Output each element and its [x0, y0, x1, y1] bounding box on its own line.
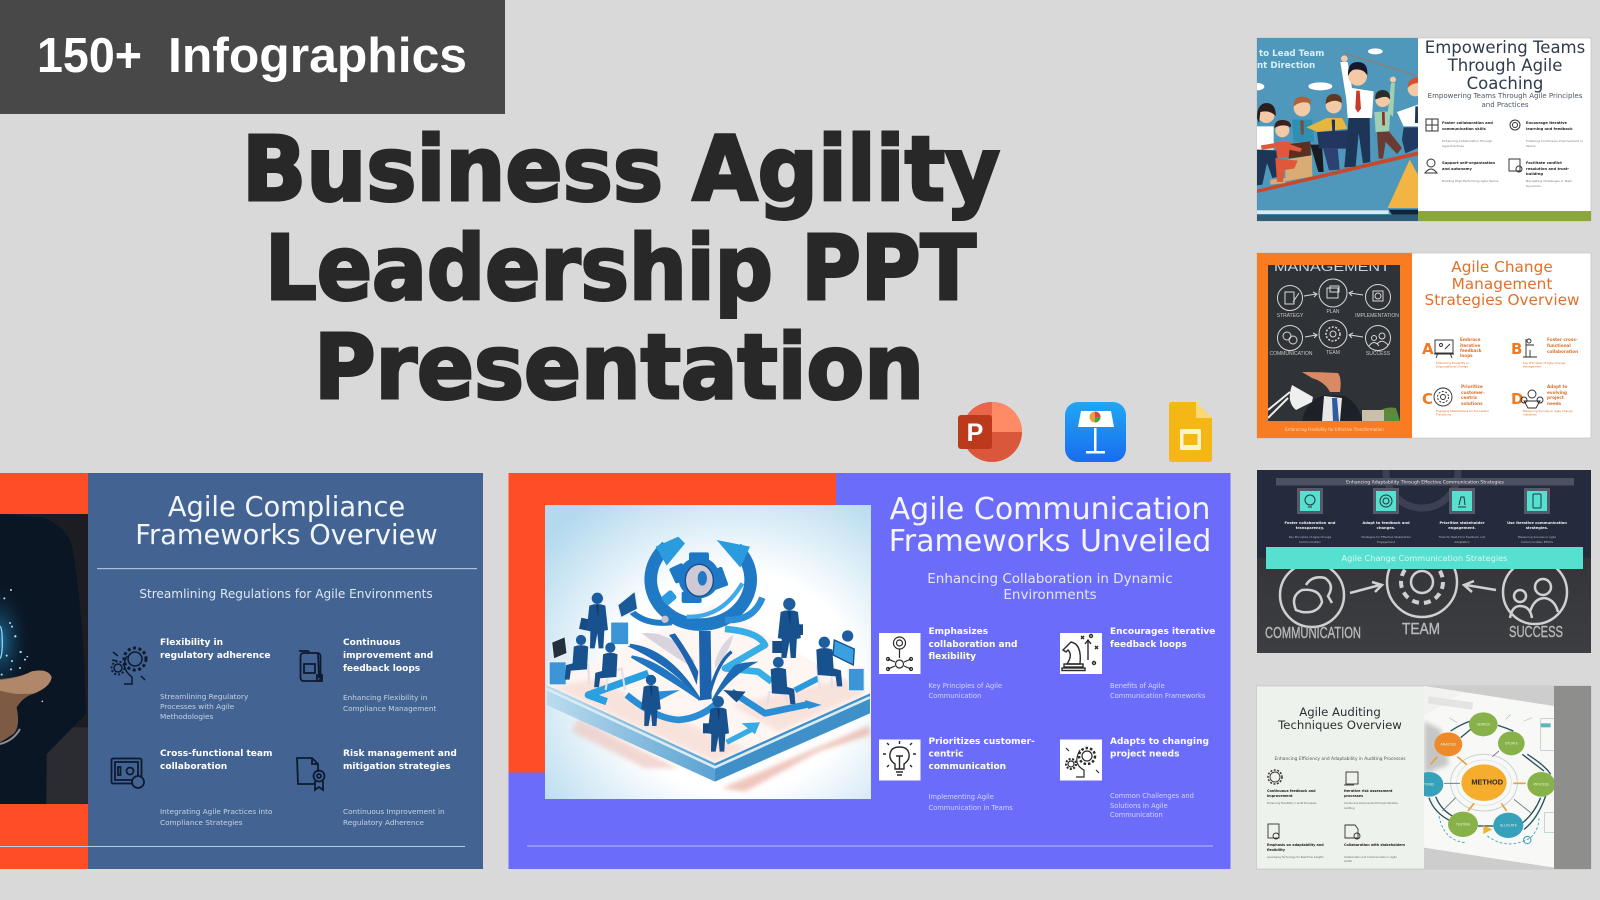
items text: Encourage iterative — [1526, 121, 1567, 125]
columns text — [1285, 521, 1567, 544]
item: emphasizes collaboration: Communication — [928, 692, 981, 700]
photo: method diagram: METHOD — [1471, 778, 1503, 787]
items text: feedback — [1460, 348, 1482, 353]
items text: Emphasis on adaptability and — [1267, 843, 1324, 847]
heading — [1425, 38, 1585, 93]
item: adapts — [1110, 737, 1209, 819]
items text: Facilitate conflict — [1526, 161, 1562, 165]
items text: Auditing — [1344, 806, 1355, 810]
item: cross-functional: Compliance Strategies — [160, 818, 243, 827]
columns text: Foster collaboration and — [1285, 521, 1336, 525]
items text: Embracing Flexibility in — [1436, 361, 1469, 365]
items text: Engaging Stakeholders for Successful — [1436, 409, 1489, 413]
item: customer-centric — [928, 737, 1035, 812]
item: emphasizes collaboration: flexibility — [928, 652, 976, 662]
items text: resolution and trust- — [1526, 167, 1570, 171]
photo: method diagram: UPDATE — [1505, 742, 1518, 746]
items text: and autonomy — [1442, 167, 1472, 171]
subheading — [927, 571, 1173, 603]
item: customer-centric: Communication in Teams — [928, 804, 1013, 812]
items text: loops — [1460, 353, 1473, 358]
columns text: Engagement — [1377, 540, 1396, 544]
teal title bar — [1266, 547, 1583, 569]
item: iterative feedback: feedback loops — [1110, 640, 1187, 650]
item: customer-centric: Prioritizes customer- — [928, 737, 1035, 747]
icon: gears in bulb — [112, 648, 146, 684]
illustration: team on seesaw — [1251, 38, 1423, 221]
heading: Agile Auditing — [1299, 705, 1381, 719]
items text — [1267, 789, 1405, 863]
item: emphasizes collaboration — [928, 627, 1017, 700]
item: flexibility: Streamlining Regulatory — [160, 692, 249, 701]
items text: Continuous feedback and — [1267, 789, 1316, 793]
items text — [1435, 337, 1578, 416]
items text: flexibility — [1267, 848, 1286, 852]
icon: certified document — [297, 758, 324, 790]
items text: processes — [1344, 794, 1363, 798]
photo: method diagram — [1415, 686, 1558, 869]
items text: Key Principles of Agile Change — [1523, 361, 1566, 365]
items text: customer- — [1461, 390, 1485, 395]
item: adapts: project needs — [1110, 750, 1179, 760]
items text: Adapt to — [1547, 384, 1568, 389]
items text: improvement — [1267, 794, 1293, 798]
item: emphasizes collaboration: Key Principles of Agile — [928, 682, 1002, 690]
items text: Enhancing Flexibility in Audit Processes — [1267, 801, 1317, 805]
items text: solutions — [1461, 401, 1483, 406]
items text: Management — [1523, 364, 1542, 368]
items text: Transitions — [1435, 412, 1452, 416]
photo: chalkboard diagram: IMPLEMENTATION — [1355, 313, 1399, 319]
item: iterative feedback: Communication Frameworks — [1110, 692, 1206, 700]
columns text: Adapt to feedback and — [1362, 521, 1410, 525]
item: cross-functional: Integrating Agile Practices into — [160, 807, 273, 816]
item: iterative feedback: Benefits of Agile — [1110, 682, 1165, 690]
heading: Coaching — [1467, 74, 1543, 93]
heading: Frameworks Unveiled — [889, 524, 1211, 559]
items text: Audits — [1344, 859, 1353, 863]
item: flexibility: Processes with Agile — [160, 702, 235, 711]
photo: chalkboard diagram: STRATEGY — [1277, 313, 1304, 319]
thumbnail: Empowering Teams — [1251, 38, 1591, 221]
item: flexibility — [160, 638, 270, 721]
icon: chess knight strategy — [1060, 633, 1102, 674]
heading — [1277, 705, 1402, 732]
thumbnail: Empowering Teams: nt Direction — [1257, 61, 1315, 71]
item: continuous improvement: improvement and — [343, 651, 433, 661]
chalk labels — [1265, 621, 1563, 642]
columns text: Adaptation — [1454, 540, 1470, 544]
items text: Support self-organization — [1442, 161, 1496, 165]
icon: safe — [112, 758, 144, 788]
items text: Teams — [1525, 144, 1536, 148]
heading: Agile Compliance — [168, 492, 405, 523]
heading: Techniques Overview — [1277, 718, 1402, 732]
chalk labels: COMMUNICATION — [1265, 625, 1361, 642]
boxes and briefcase — [1270, 141, 1312, 185]
letters: B — [1511, 340, 1522, 358]
photo: method diagram: SEARCH — [1477, 723, 1491, 727]
photo: chalkboard diagram: MANAGEMENT — [1274, 259, 1390, 274]
columns text: Tools for Real-Time Feedback and — [1438, 535, 1485, 539]
items text: evolving — [1547, 390, 1567, 395]
items text: Fostering Continuous Improvement in — [1526, 139, 1583, 143]
item: flexibility: Flexibility in — [160, 638, 223, 648]
columns text: changes. — [1377, 526, 1396, 530]
item: iterative feedback — [1110, 627, 1215, 700]
icon: Keynote — [1065, 402, 1126, 462]
item: flexibility: regulatory adherence — [160, 651, 270, 661]
items text — [1442, 121, 1583, 188]
subheading: and Practices — [1481, 101, 1529, 109]
item icons — [1434, 339, 1543, 408]
item: cross-functional — [160, 749, 273, 827]
item: adapts: Communication — [1110, 811, 1163, 819]
heading: Management — [1452, 275, 1552, 293]
item: customer-centric: communication — [928, 762, 1006, 772]
item: adapts: Solutions in Agile — [1110, 802, 1168, 810]
man: green shirt — [1374, 77, 1402, 159]
photo: chalkboard diagram — [1268, 259, 1400, 421]
subheading: Streamlining Regulations for Agile Environments — [139, 587, 433, 601]
subheading: Enhancing Efficiency and Adaptability in Auditing Processes — [1274, 756, 1406, 762]
man: yellow shirt — [1306, 94, 1348, 170]
icon: gears bulb — [1060, 740, 1102, 780]
items text: needs — [1547, 401, 1562, 406]
items text: building — [1526, 172, 1543, 176]
subheading — [1428, 92, 1583, 109]
thumbnail: Empowering Teams: to Lead Team — [1259, 49, 1324, 59]
photo: method diagram: PROCESS — [1534, 783, 1549, 787]
item: iterative feedback: Encourages iterative — [1110, 627, 1215, 637]
items text: functional — [1547, 343, 1571, 348]
items text: Embrace — [1460, 337, 1481, 342]
title: Presentation — [314, 315, 924, 419]
item: continuous improvement: Compliance Management — [343, 704, 436, 713]
heading: Strategies Overview — [1424, 291, 1580, 309]
items text: Agile Practices — [1442, 144, 1464, 148]
icon: Google Slides — [1169, 402, 1212, 462]
item: risk management: Risk management and — [343, 749, 457, 759]
item: risk management: Continuous Improvement in — [343, 807, 445, 816]
items text: iterative — [1460, 343, 1480, 348]
items text: Collaboration with stakeholders — [1344, 843, 1405, 847]
thumbnail: Agile Change Communication: Enhancing Adaptability Through Effective Communication Strategies — [1346, 480, 1504, 486]
items text: communication skills — [1442, 127, 1487, 131]
subheading: Empowering Teams Through Agile Principles — [1428, 92, 1583, 100]
columns text: engagement. — [1448, 526, 1476, 530]
thumbnail: Agile Change Communication — [1257, 470, 1591, 653]
chalk diagram — [1278, 569, 1568, 628]
photo: method diagram: TIONS — [1423, 783, 1434, 787]
heading — [889, 492, 1211, 559]
items text: Foster collaboration and — [1442, 121, 1493, 125]
letters: A — [1422, 340, 1434, 358]
heading: Empowering Teams — [1425, 38, 1585, 57]
items text: Continuous Improvement through Iterative — [1344, 801, 1398, 805]
items text: centric — [1461, 395, 1478, 400]
heading: Frameworks Overview — [135, 520, 438, 551]
title — [242, 117, 1000, 419]
subheading: Environments — [1003, 587, 1097, 603]
item: emphasizes collaboration: Emphasizes — [928, 627, 988, 637]
columns text: Strategies for Effective Stakeholder — [1361, 535, 1412, 539]
teal title bar: Agile Change Communication Strategies — [1342, 553, 1507, 563]
item: adapts: Common Challenges and — [1110, 792, 1194, 800]
chalk labels: TEAM — [1402, 621, 1440, 638]
columns text: Use iterative communication — [1507, 521, 1567, 525]
items text: Leveraging Technology for Real-Time Insights — [1267, 855, 1324, 859]
photo: chalkboard diagram: SUCCESS — [1366, 351, 1391, 357]
photo: method diagram: ANALYSIS — [1440, 743, 1456, 747]
items text: Prioritize — [1461, 384, 1483, 389]
item: risk management: mitigation strategies — [343, 762, 451, 772]
item: cross-functional: Cross-functional team — [160, 749, 272, 759]
photo: method diagram: ALLOCATE — [1500, 824, 1517, 828]
woman: orange top — [1261, 120, 1302, 182]
badge: 150+ Infographics: Infographics — [168, 29, 467, 83]
heading: Agile Communication — [890, 492, 1210, 527]
thumbnail: Agile Change Management: Embracing Flexibility for Effective Transformation — [1285, 427, 1384, 432]
items text: collaboration — [1547, 349, 1578, 354]
badge: 150+ Infographics — [0, 0, 505, 114]
woman: left — [1257, 103, 1279, 185]
items text: Iterative risk assessment — [1344, 789, 1393, 793]
title: Business Agility — [242, 117, 1000, 221]
columns text: Measuring Success in Agile — [1518, 535, 1556, 539]
man: teal shirt — [1292, 97, 1324, 172]
title: Leadership PPT — [265, 216, 976, 320]
icon: extinguisher — [300, 651, 322, 681]
columns text: Communication — [1299, 540, 1321, 544]
photo: chalkboard diagram: COMMUNICATION — [1270, 351, 1313, 357]
icon: PowerPoint: P — [967, 419, 983, 447]
photo: hand holding digital globe — [0, 514, 88, 804]
heading — [1424, 258, 1580, 309]
item: continuous improvement: feedback loops — [343, 664, 420, 674]
illustration: isometric agile team — [545, 505, 871, 799]
items text: Dynamics — [1526, 184, 1541, 188]
columns text: strategies. — [1526, 526, 1549, 530]
columns text: transparency. — [1296, 526, 1325, 530]
item: continuous improvement — [343, 638, 436, 713]
letters: C — [1422, 390, 1433, 408]
columns text: Key Principles of Agile Change — [1289, 535, 1331, 539]
item: emphasizes collaboration: collaboration and — [928, 640, 1017, 650]
photo: method diagram: TESTING — [1455, 823, 1471, 827]
columns text: Communication Efforts — [1521, 540, 1554, 544]
icon: target network — [879, 633, 920, 674]
items text: Enhancing Collaboration Through — [1442, 139, 1492, 143]
chalk labels: SUCCESS — [1509, 624, 1563, 641]
item: adapts: Adapts to changing — [1110, 737, 1209, 747]
items text: Navigating Challenges in Team — [1526, 179, 1572, 183]
items text: Building High-Performing Agile Teams — [1442, 179, 1499, 183]
subheading: Enhancing Collaboration in Dynamic — [927, 571, 1173, 587]
letters — [1422, 340, 1523, 408]
photo: chalkboard diagram: PLAN — [1326, 309, 1340, 315]
man: far right — [1397, 77, 1418, 154]
item: customer-centric: centric — [928, 750, 964, 760]
panel: Agile Compliance Frameworks — [0, 473, 483, 869]
item: continuous improvement: Continuous — [343, 638, 401, 648]
icon: PowerPoint — [958, 402, 1022, 462]
man: leader — [1340, 55, 1374, 167]
panel: Agile Communication Frameworks — [508, 473, 1230, 869]
items text: Measuring Success in Agile Change — [1523, 409, 1573, 413]
items text: Organizational Change — [1436, 364, 1468, 368]
items text: learning and feedback — [1526, 127, 1573, 131]
items text: Collaboration and Communication in Agile — [1344, 855, 1397, 859]
item: cross-functional: collaboration — [160, 762, 227, 772]
letters: D — [1511, 390, 1523, 408]
badge: 150+ Infographics: 150+ — [37, 29, 142, 83]
columns text: Prioritize stakeholder — [1439, 521, 1485, 525]
items text: Foster cross- — [1547, 337, 1578, 342]
item: continuous improvement: Enhancing Flexibility in — [343, 693, 427, 702]
item icons — [1425, 119, 1522, 173]
item: risk management — [343, 749, 457, 827]
item: flexibility: Methodologies — [160, 712, 213, 721]
thumbnail: Agile Change Management — [1256, 253, 1591, 438]
thumbnail: Agile Auditing — [1256, 686, 1591, 869]
items text: project — [1547, 395, 1564, 400]
item icons — [1268, 770, 1360, 839]
heading: Through Agile — [1447, 56, 1562, 75]
heading — [135, 492, 438, 551]
icon: light bulb — [879, 740, 920, 780]
item: risk management: Regulatory Adherence — [343, 818, 425, 827]
teal icons row — [1297, 488, 1550, 514]
heading: Agile Change — [1451, 258, 1553, 276]
items text: Initiatives — [1523, 412, 1537, 416]
item: customer-centric: Implementing Agile — [928, 793, 994, 801]
photo: chalkboard diagram: TEAM — [1326, 350, 1340, 356]
